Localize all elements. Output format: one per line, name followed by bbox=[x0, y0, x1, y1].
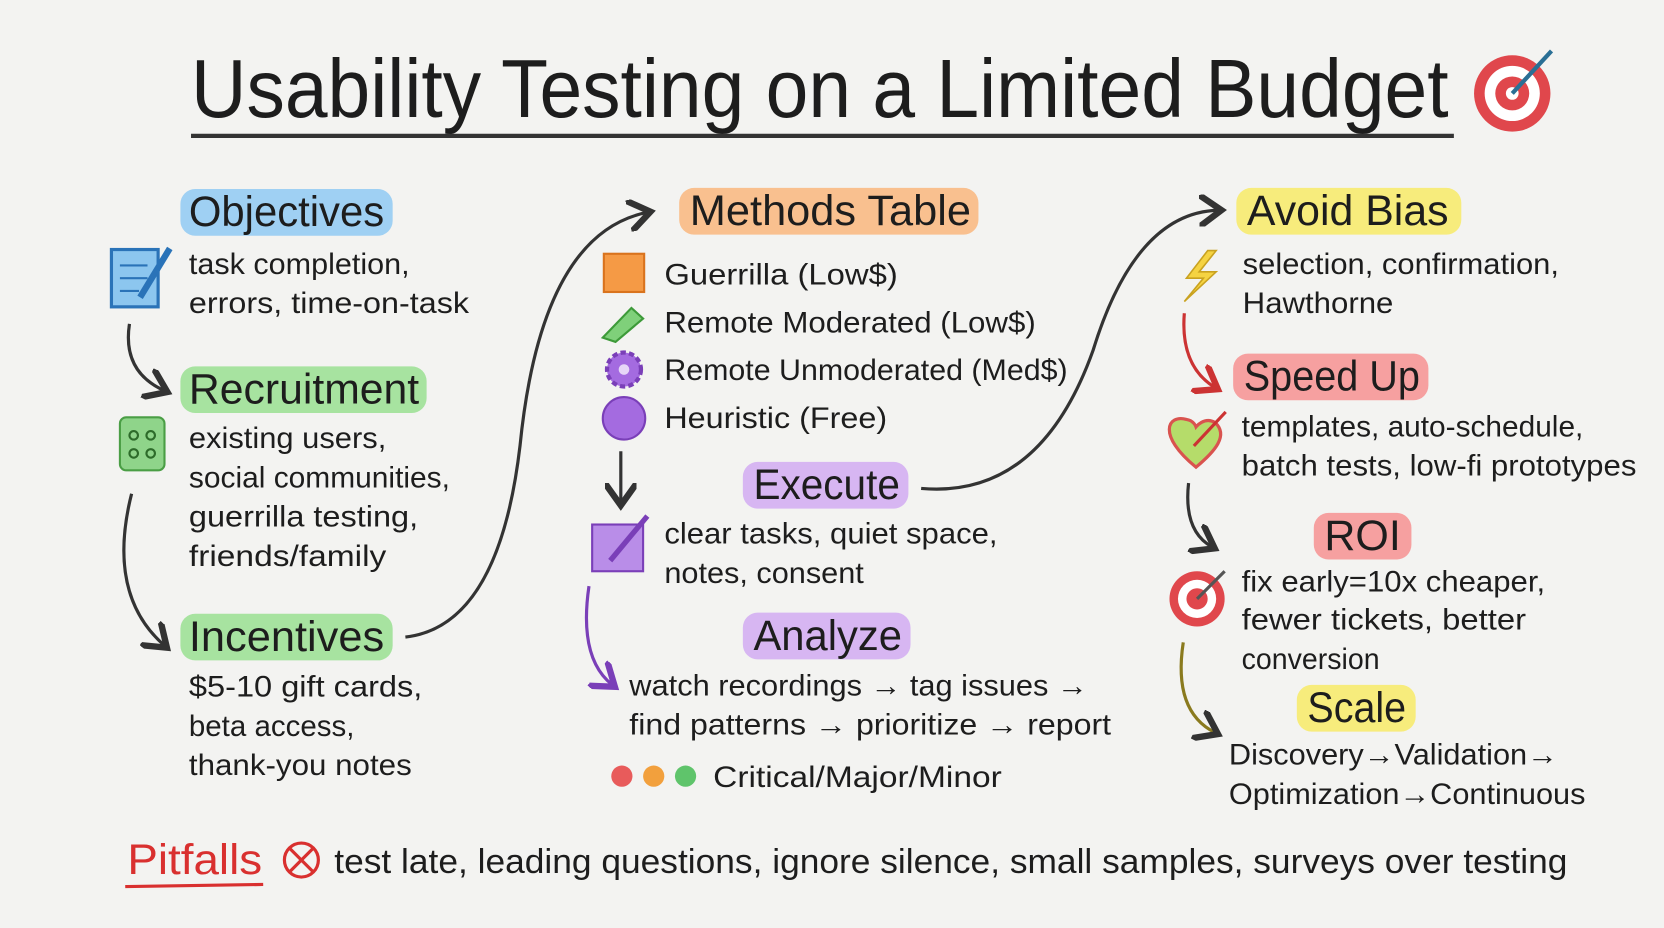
panel: incentives: $5-10 gift cards, bbox=[189, 671, 422, 704]
panel: execute: Execute bbox=[753, 461, 900, 508]
footer: pitfalls bbox=[125, 836, 1567, 887]
icon: ROI target bbox=[1169, 571, 1225, 626]
footer: pitfalls: Pitfalls bbox=[127, 836, 262, 883]
panel: incentives: beta access, bbox=[189, 710, 354, 743]
arrow bbox=[124, 494, 164, 646]
panel: avoid bias: Hawthorne bbox=[1243, 287, 1393, 320]
panel: ROI: fewer tickets, better bbox=[1242, 604, 1526, 637]
panel: methods table: Methods Table bbox=[690, 187, 971, 234]
arrow bbox=[1188, 483, 1212, 547]
icon: title target bbox=[1474, 51, 1552, 132]
panel: incentives: Incentives bbox=[189, 613, 384, 660]
panel: methods table: Remote Moderated (Low$) bbox=[664, 306, 1036, 339]
panel: scale: Discovery→Validation→ bbox=[1229, 738, 1558, 771]
panel: scale: Optimization→Continuous bbox=[1229, 778, 1585, 811]
panel: recruitment: social communities, bbox=[189, 461, 450, 494]
panel: avoid bias: Avoid Bias bbox=[1247, 187, 1449, 234]
icon: lightning bbox=[1184, 251, 1216, 302]
panel: avoid bias bbox=[1236, 187, 1559, 320]
panel: methods table: Remote Unmoderated (Med$) bbox=[664, 354, 1068, 387]
footer: pitfalls: test late, leading questions, ignore silence, small samples, surveys over testing bbox=[334, 843, 1567, 881]
panel: avoid bias: selection, confirmation, bbox=[1243, 248, 1559, 281]
panel: speed up: batch tests, low-fi prototypes bbox=[1242, 450, 1636, 483]
panel: objectives: Objectives bbox=[189, 188, 384, 235]
panel: methods table bbox=[603, 187, 1068, 440]
icon: purple pencil box bbox=[592, 516, 647, 571]
panel: analyze bbox=[611, 612, 1112, 794]
title: Usability Testing on a Limited Budget bbox=[191, 42, 1449, 135]
panel: incentives bbox=[180, 613, 422, 782]
panel: ROI: conversion bbox=[1242, 643, 1380, 676]
panel: objectives: errors, time-on-task bbox=[189, 287, 469, 320]
panel: execute: notes, consent bbox=[664, 557, 865, 590]
panel: recruitment: guerrilla testing, bbox=[189, 501, 418, 534]
panel: incentives: thank-you notes bbox=[189, 749, 412, 782]
arrow: to avoid bias bbox=[921, 210, 1218, 489]
panel: scale bbox=[1229, 684, 1585, 811]
arrow bbox=[619, 451, 622, 502]
icon: green grid bbox=[120, 417, 164, 470]
panel: analyze: watch recordings → tag issues → bbox=[628, 669, 1088, 702]
panel: speed up bbox=[1233, 353, 1636, 483]
panel: recruitment: Recruitment bbox=[189, 365, 419, 412]
panel: objectives: task completion, bbox=[189, 248, 410, 281]
panel: analyze: Critical/Major/Minor bbox=[713, 761, 1002, 794]
panel: ROI bbox=[1242, 512, 1545, 676]
panel: ROI: fix early=10x cheaper, bbox=[1242, 565, 1545, 598]
panel: speed up: Speed Up bbox=[1244, 353, 1420, 400]
panel: analyze: Analyze bbox=[753, 612, 902, 659]
arrow: to methods bbox=[405, 212, 647, 637]
panel: methods table: Guerrilla (Low$) bbox=[664, 259, 898, 292]
panel: recruitment bbox=[180, 365, 450, 573]
panel: recruitment: friends/family bbox=[189, 540, 386, 573]
panel: scale: Scale bbox=[1307, 684, 1406, 731]
panel: speed up: templates, auto-schedule, bbox=[1242, 410, 1583, 443]
panel: objectives bbox=[180, 188, 469, 320]
icon: notepad bbox=[111, 248, 170, 307]
arrow bbox=[1184, 313, 1215, 388]
panel: execute: clear tasks, quiet space, bbox=[664, 518, 998, 551]
icon: heart target bbox=[1169, 412, 1226, 467]
panel: analyze: find patterns → prioritize → report bbox=[629, 709, 1112, 742]
panel: execute bbox=[664, 461, 998, 590]
panel: methods table: Heuristic (Free) bbox=[664, 402, 887, 435]
arrow bbox=[128, 324, 164, 391]
arrow bbox=[586, 586, 612, 685]
panel: ROI: ROI bbox=[1324, 512, 1401, 559]
arrow bbox=[1181, 642, 1215, 733]
panel: recruitment: existing users, bbox=[189, 422, 386, 455]
